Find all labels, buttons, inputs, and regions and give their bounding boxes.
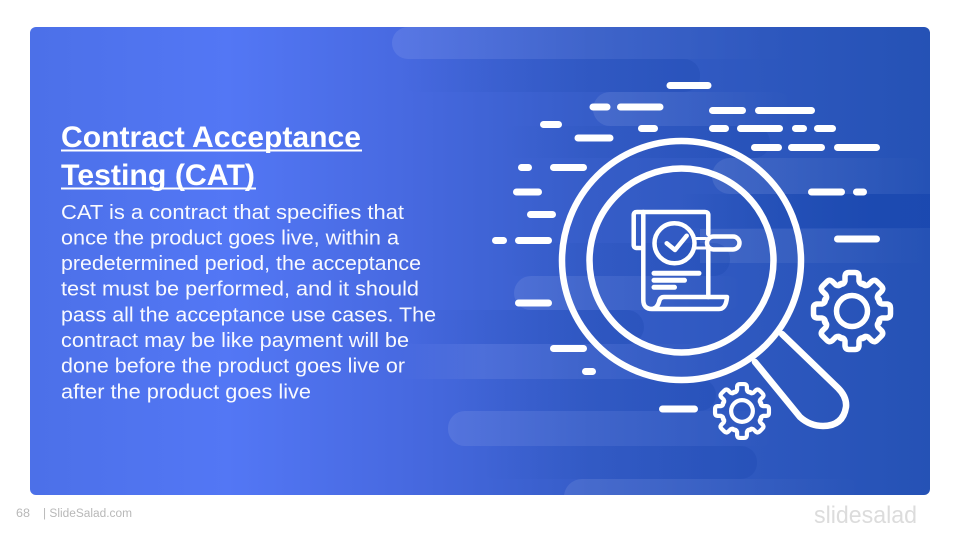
title	[61, 121, 362, 192]
icon: contract document with check	[634, 212, 740, 309]
body text: done before the product goes live or	[61, 356, 405, 378]
footer: slidesalad logo: slidesalad	[814, 502, 917, 529]
footer: page number and site: | SlideSalad.com	[43, 508, 132, 520]
title: Testing (CAT)	[61, 159, 255, 192]
body text: after the product goes live	[61, 381, 311, 403]
title: Contract Acceptance	[61, 121, 361, 154]
body text: pass all the acceptance use cases. The	[61, 304, 436, 326]
body text: contract may be like payment will be	[61, 330, 409, 352]
speed dashes	[496, 86, 876, 409]
icon: small gear	[715, 384, 769, 438]
body text: CAT is a contract that specifies that	[61, 202, 404, 224]
icon: large gear	[814, 272, 890, 350]
footer: page number and site: 68	[16, 508, 30, 520]
icon: magnifying glass	[562, 141, 846, 426]
body text: predetermined period, the acceptance	[61, 253, 421, 275]
body text	[61, 202, 436, 403]
body text: once the product goes live, within a	[61, 228, 400, 250]
body text: test must be performed, and it should	[61, 279, 419, 301]
